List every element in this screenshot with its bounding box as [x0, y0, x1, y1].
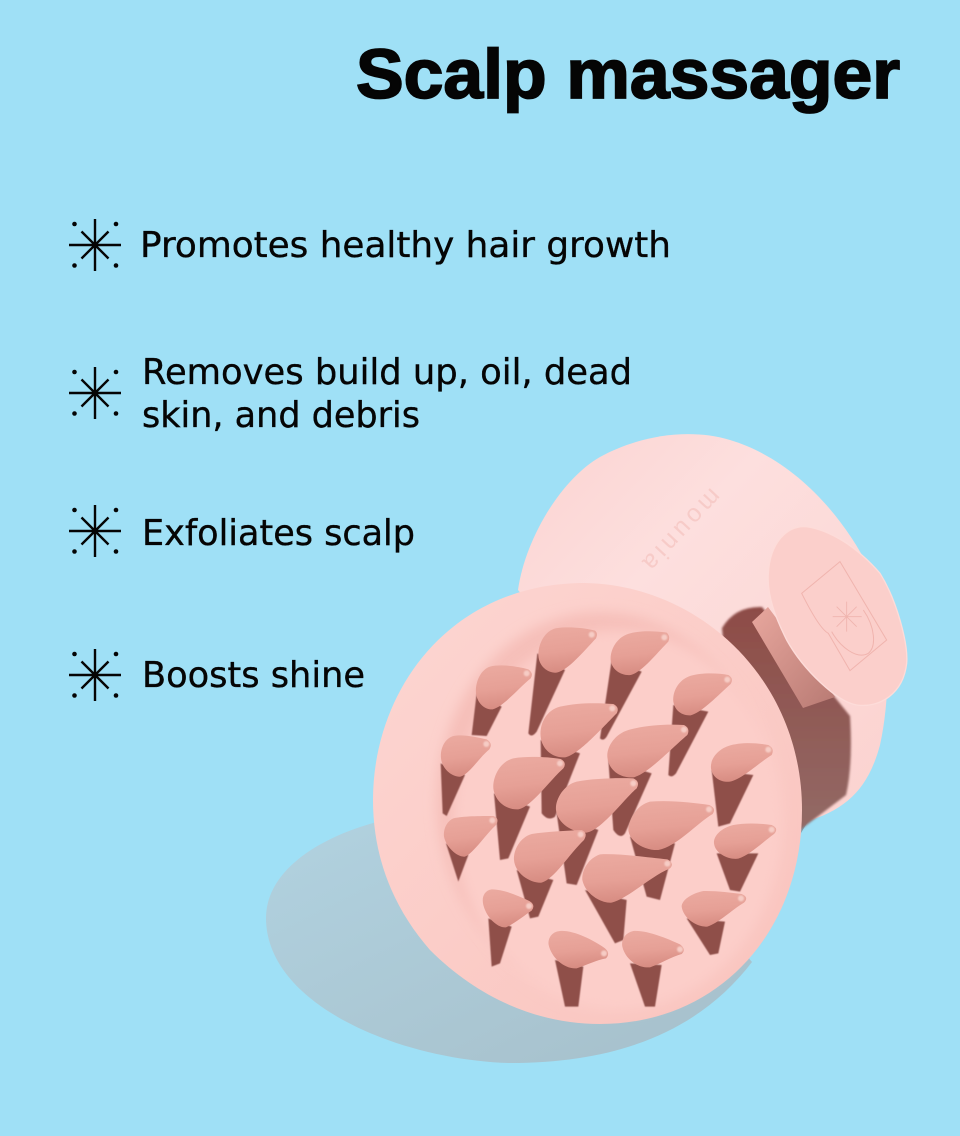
icon: sparkle [69, 219, 121, 271]
bristle tips [483, 632, 775, 956]
title: Scalp massager [356, 35, 900, 113]
benefit: healthy hair growth [69, 219, 671, 271]
icon: sparkle [69, 649, 121, 701]
massager basin edge [437, 612, 763, 988]
text: promotes healthy hair growth: Promotes healthy hair growth [140, 225, 671, 266]
icon: sparkle [69, 505, 121, 557]
text: removes build up, oil, dead skin, and debris: skin, and debris [142, 395, 420, 436]
icon: sparkle [69, 367, 121, 419]
massager head rim [373, 583, 802, 1024]
benefit: boosts shine [69, 649, 365, 701]
benefit: exfoliates scalp [69, 505, 415, 557]
floor shadow [266, 820, 752, 1063]
handle hollow shadow [722, 607, 851, 830]
bristle spikes [441, 627, 776, 968]
bristle shadows [441, 653, 758, 1007]
handle grip [768, 527, 907, 705]
benefit: removes build up [69, 352, 632, 436]
shadow wedge beside the head [775, 802, 816, 838]
massager basin [453, 630, 783, 1010]
embossed logo [802, 562, 887, 671]
handle stem [752, 607, 835, 708]
text: exfoliates scalp: Exfoliates scalp [142, 513, 415, 554]
text: boosts shine: Boosts shine [142, 655, 365, 696]
embossed brand name: mounia [634, 483, 727, 580]
text: removes build up, oil, dead skin, and debris: Removes build up, oil, dead [142, 352, 632, 393]
massager back plate [518, 434, 887, 822]
bristles [441, 627, 776, 1007]
text: removes build up, oil, dead skin, and debris [142, 352, 632, 436]
product: scalp massager [266, 434, 907, 1063]
